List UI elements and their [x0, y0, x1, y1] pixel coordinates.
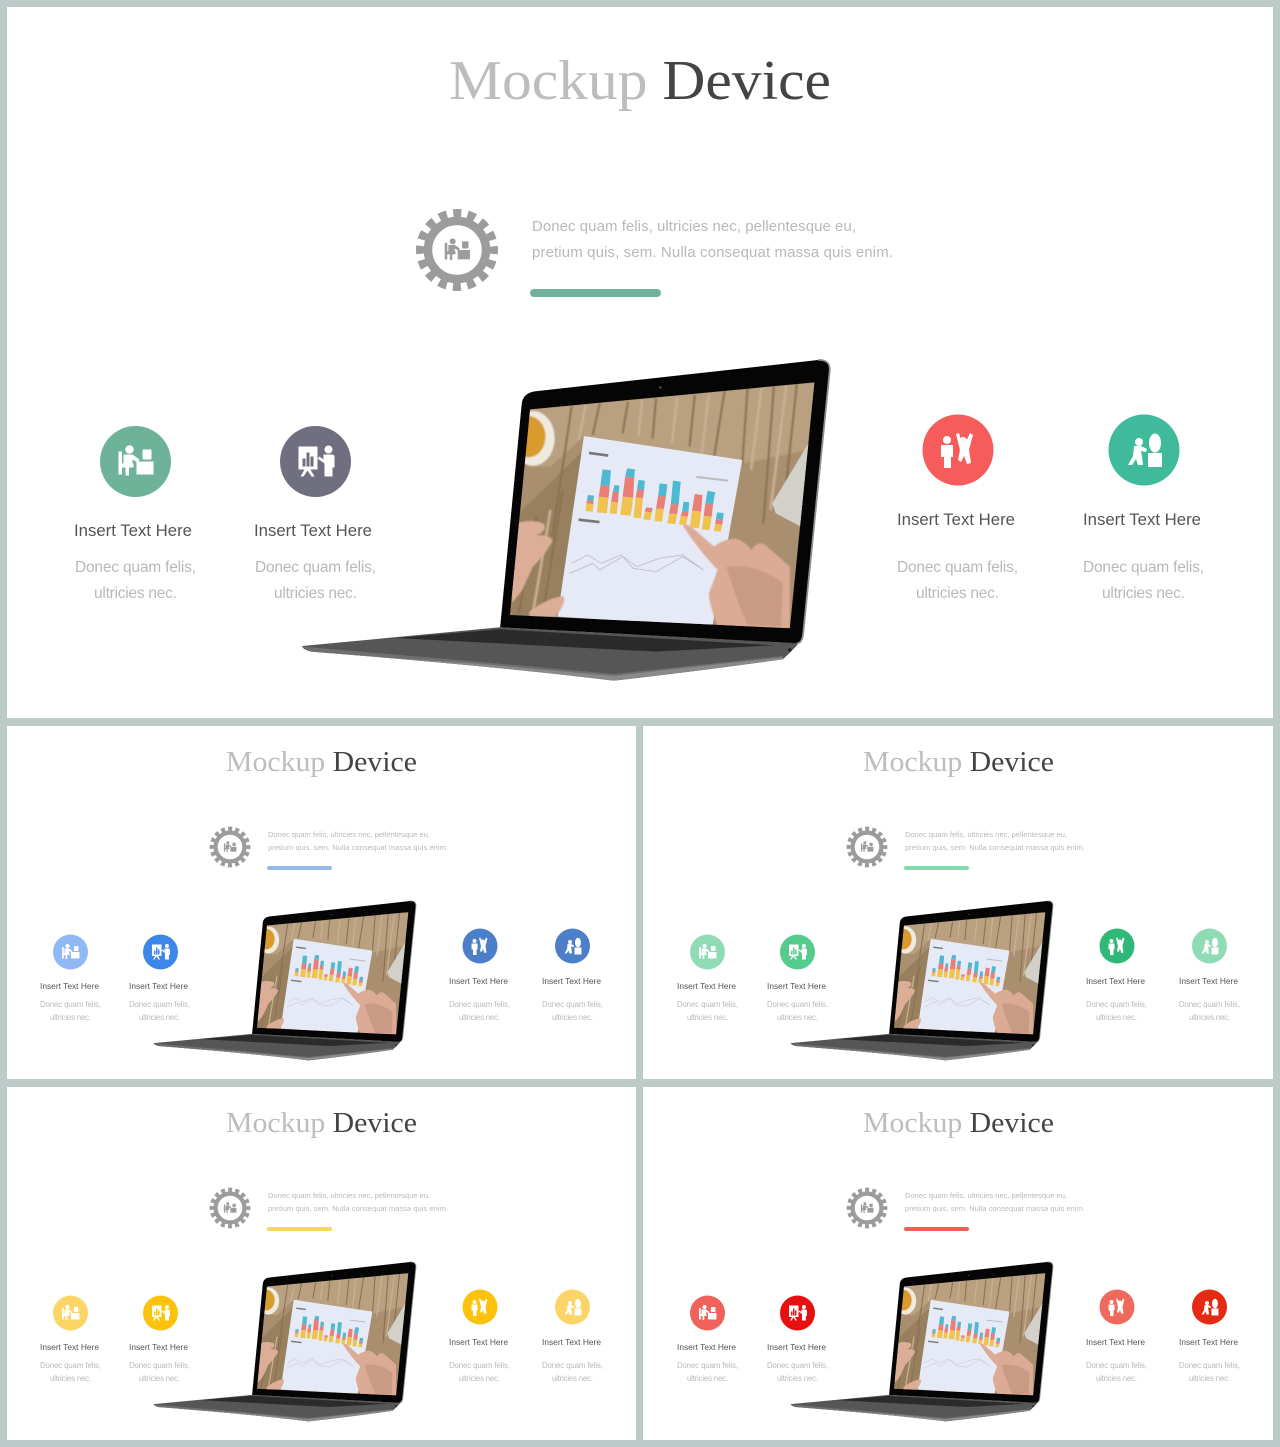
item: right one	[897, 414, 1018, 602]
items: ultricies nec.	[1189, 1374, 1230, 1383]
items	[40, 1290, 603, 1383]
laptop	[791, 901, 1053, 1060]
items: Donec quam felis,	[1179, 1000, 1240, 1009]
items: Donec quam felis,	[449, 1000, 510, 1009]
items: Donec quam felis,	[449, 1361, 510, 1370]
item: left one: ultricies nec.	[94, 585, 177, 602]
item: left two	[254, 426, 376, 602]
accent bar	[267, 1227, 332, 1231]
items: Insert Text Here	[129, 1342, 188, 1352]
items: ultricies nec.	[139, 1013, 180, 1022]
title: Mockup Device	[863, 747, 1054, 778]
items: ultricies nec.	[50, 1013, 91, 1022]
intro text	[532, 218, 893, 261]
items: Insert Text Here	[677, 1342, 736, 1352]
items: Donec quam felis,	[767, 1361, 828, 1370]
items: Donec quam felis,	[1179, 1361, 1240, 1370]
panel: green variant	[643, 726, 1273, 1079]
intro text: pretium quis, sem. Nulla consequat massa quis enim.	[268, 843, 448, 852]
items: Insert Text Here	[542, 1337, 601, 1347]
items: Insert Text Here	[1086, 976, 1145, 986]
items: ultricies nec.	[459, 1374, 500, 1383]
intro text	[905, 1191, 1085, 1213]
items: Insert Text Here	[449, 976, 508, 986]
intro text	[268, 830, 448, 852]
item: right two: ultricies nec.	[1102, 585, 1185, 602]
icon: gear	[212, 1190, 248, 1226]
icon: gear	[849, 1190, 885, 1226]
items: ultricies nec.	[687, 1013, 728, 1022]
item: right one: Insert Text Here	[897, 510, 1015, 529]
items: Insert Text Here	[767, 1342, 826, 1352]
items: Insert Text Here	[1086, 1337, 1145, 1347]
laptop	[302, 360, 830, 681]
items: Donec quam felis,	[542, 1361, 603, 1370]
intro text	[268, 1191, 448, 1213]
items: Insert Text Here	[542, 976, 601, 986]
items: Donec quam felis,	[1086, 1361, 1147, 1370]
items	[677, 928, 1240, 1022]
intro text: Donec quam felis, ultricies nec, pellentesque eu,	[905, 830, 1067, 839]
items: ultricies nec.	[1096, 1374, 1137, 1383]
items: ultricies nec.	[687, 1374, 728, 1383]
accent bar	[904, 866, 969, 870]
items: Insert Text Here	[40, 1342, 99, 1352]
intro text: pretium quis, sem. Nulla consequat massa quis enim.	[532, 244, 893, 261]
items: ultricies nec.	[50, 1374, 91, 1383]
item: left two: ultricies nec.	[274, 585, 357, 602]
intro text: pretium quis, sem. Nulla consequat massa quis enim.	[905, 1204, 1085, 1213]
laptop	[791, 1262, 1053, 1421]
items: Donec quam felis,	[677, 1361, 738, 1370]
items: Donec quam felis,	[1086, 1000, 1147, 1009]
laptop	[154, 901, 416, 1060]
items: ultricies nec.	[1096, 1013, 1137, 1022]
items: Insert Text Here	[1179, 1337, 1238, 1347]
panel: red variant	[643, 1087, 1273, 1440]
intro text: pretium quis, sem. Nulla consequat massa quis enim.	[268, 1204, 448, 1213]
items: Donec quam felis,	[677, 1000, 738, 1009]
item: left two: Insert Text Here	[254, 521, 372, 540]
icon: gear	[849, 829, 885, 865]
icon: gear	[212, 829, 248, 865]
items: Donec quam felis,	[40, 1000, 101, 1009]
item: right two	[1083, 414, 1204, 602]
items: Insert Text Here	[40, 981, 99, 991]
items: Donec quam felis,	[542, 1000, 603, 1009]
items: ultricies nec.	[777, 1013, 818, 1022]
intro text	[905, 830, 1085, 852]
items: Insert Text Here	[129, 981, 188, 991]
intro text: Donec quam felis, ultricies nec, pellentesque eu,	[532, 218, 856, 235]
items: Donec quam felis,	[767, 1000, 828, 1009]
title: Mockup Device	[449, 50, 831, 112]
item: right two: Donec quam felis,	[1083, 559, 1204, 576]
icon: gear	[420, 214, 494, 286]
intro text: Donec quam felis, ultricies nec, pellentesque eu,	[268, 1191, 430, 1200]
laptop	[154, 1262, 416, 1421]
items: Insert Text Here	[1179, 976, 1238, 986]
accent bar	[904, 1227, 969, 1231]
items: ultricies nec.	[552, 1374, 593, 1383]
item: left one: Donec quam felis,	[75, 559, 196, 576]
items: ultricies nec.	[459, 1013, 500, 1022]
title: Mockup Device	[226, 747, 417, 778]
items: Donec quam felis,	[40, 1361, 101, 1370]
items: ultricies nec.	[139, 1374, 180, 1383]
items: Insert Text Here	[677, 981, 736, 991]
items	[40, 928, 603, 1022]
panel: main slide	[7, 7, 1273, 718]
intro text: Donec quam felis, ultricies nec, pellentesque eu,	[268, 830, 430, 839]
item: right one: ultricies nec.	[916, 585, 999, 602]
item: left one	[74, 426, 196, 602]
item: right two: Insert Text Here	[1083, 510, 1201, 529]
accent bar	[267, 866, 332, 870]
items: Insert Text Here	[767, 981, 826, 991]
items: ultricies nec.	[1189, 1013, 1230, 1022]
item: right one: Donec quam felis,	[897, 559, 1018, 576]
panel: blue variant	[7, 726, 636, 1079]
items: Insert Text Here	[449, 1337, 508, 1347]
items: ultricies nec.	[777, 1374, 818, 1383]
item: left one: Insert Text Here	[74, 521, 192, 540]
panel: yellow variant	[7, 1087, 636, 1440]
items	[677, 1290, 1240, 1383]
items: Donec quam felis,	[129, 1361, 190, 1370]
items: Donec quam felis,	[129, 1000, 190, 1009]
item: left two: Donec quam felis,	[255, 559, 376, 576]
items: ultricies nec.	[552, 1013, 593, 1022]
intro text: pretium quis, sem. Nulla consequat massa quis enim.	[905, 843, 1085, 852]
title: Mockup Device	[863, 1108, 1054, 1139]
title: Mockup Device	[226, 1108, 417, 1139]
accent bar	[530, 289, 661, 297]
intro text: Donec quam felis, ultricies nec, pellentesque eu,	[905, 1191, 1067, 1200]
